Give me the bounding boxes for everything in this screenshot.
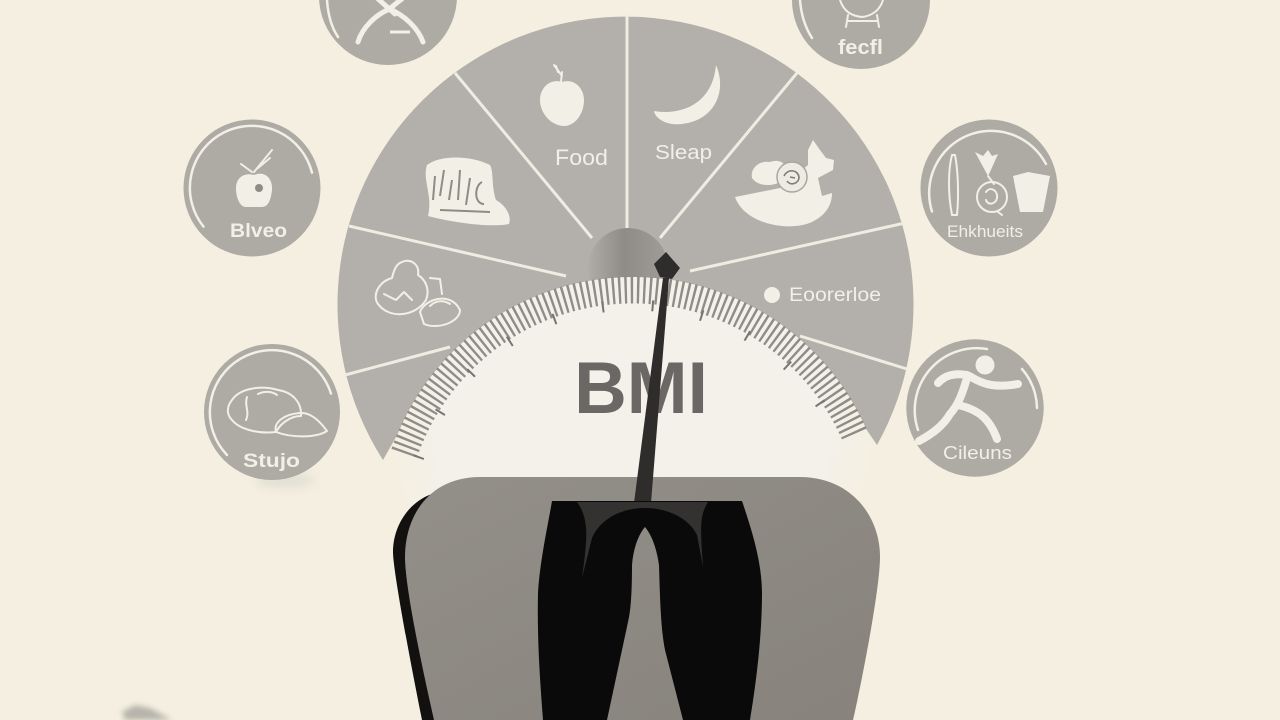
icon: clouds [228,388,327,436]
panel: fan of segments [338,14,914,460]
circle: top left [319,0,457,65]
segment dividers [345,14,907,375]
scale side edge [393,493,436,720]
badge [906,339,1044,477]
circle: top right [792,0,930,69]
icon: utensil [949,155,958,215]
circle: right runner [906,339,1044,477]
badge [792,0,930,69]
needle shaft [634,278,669,503]
circle: right food items [920,120,1058,256]
scale platform [405,477,880,720]
icon: cake [426,158,510,225]
smudge: below stress circle [255,472,315,488]
fan background [338,17,914,460]
gauge needle [634,252,680,503]
circle: left apple [184,120,320,256]
label: Food: Food [555,145,608,170]
icon: cup [1013,172,1050,212]
gauge hub [588,228,668,308]
ring [800,0,812,38]
icon: figure [358,0,423,42]
icon: onion [975,150,1007,215]
icon: crossbar [390,30,410,34]
badge [204,344,340,480]
heading: BMI: BMI [574,348,708,429]
icon: apple [236,150,272,207]
dial major ticks [418,305,842,458]
label: Ehkhueits [947,222,1023,241]
icon: teapot and bowl [376,261,460,326]
dial minor ticks [404,290,856,453]
badge [319,0,457,65]
label: Cileuns [943,443,1012,463]
waist panel [577,502,708,578]
label: Stujo [243,451,300,472]
scale body [393,477,880,720]
silhouette: legs [538,501,762,720]
ring [190,126,312,227]
label: Blveo [230,221,287,242]
panel: BMI dial [378,277,888,720]
dial face [378,277,888,720]
label: fecfl [838,37,883,59]
badge [184,120,320,256]
icon: runner [919,356,1018,441]
ring left [915,348,987,430]
label: Exercise with bullet: Eoorerloe [789,285,881,306]
badge [920,120,1058,256]
needle head [654,252,680,279]
legs [538,501,762,720]
ring [929,131,1046,212]
icon: crescent moon [654,65,720,124]
icon: apple [540,65,584,126]
smudge: bottom left [122,705,172,720]
ring right [1022,369,1037,408]
ring [327,0,338,37]
circle: left stress [204,344,340,480]
ring [210,350,331,455]
icon: food plate [735,140,834,226]
icon: globe on stand [840,0,883,27]
label: Sleep: Sleap [655,142,712,164]
